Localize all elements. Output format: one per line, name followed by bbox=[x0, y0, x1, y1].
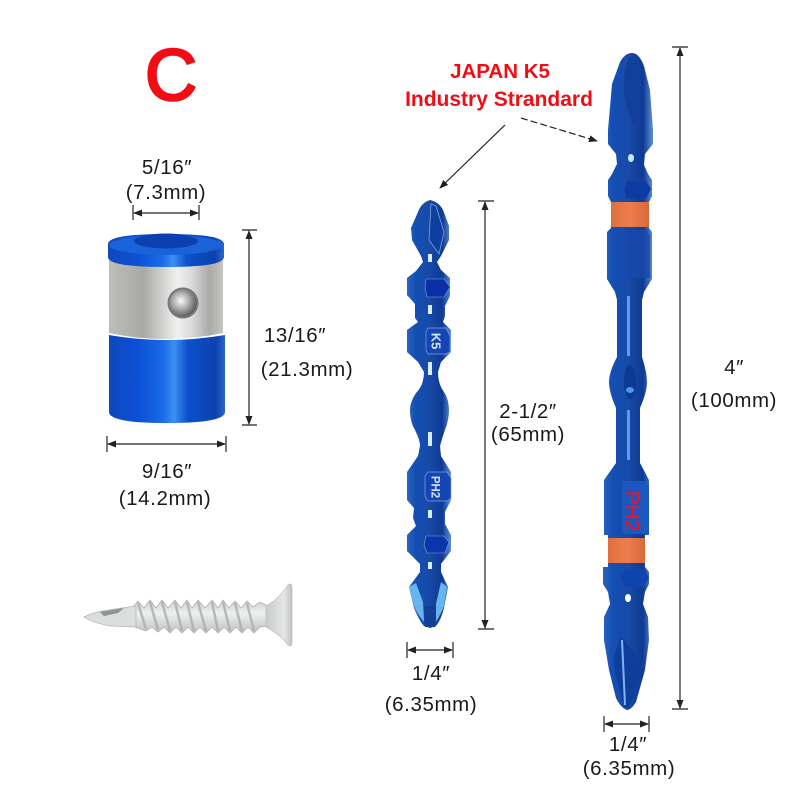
heading: Japan K5 Industry Standard bbox=[405, 60, 593, 111]
dimension: short bit hex width bbox=[385, 642, 477, 716]
long bit lower hex flat bbox=[621, 569, 649, 587]
screw drill tip bbox=[84, 606, 136, 627]
dimension: short bit length: (65mm) bbox=[491, 423, 565, 446]
screw countersunk head bbox=[266, 584, 292, 646]
short bit K5 mark: K5 bbox=[428, 333, 444, 349]
magnetic collar bbox=[108, 234, 225, 423]
dimension: long bit hex width: (6.35mm) bbox=[583, 757, 675, 780]
short K5 bit bbox=[407, 200, 451, 628]
short bit body bbox=[407, 200, 451, 628]
collar hole bbox=[134, 234, 198, 248]
short bit hex flat 1 bbox=[425, 279, 450, 297]
dimension: collar bore: 5/16″ bbox=[142, 156, 192, 179]
collar ball bearing bbox=[168, 288, 198, 318]
short bit lower tip flutes bbox=[409, 582, 447, 627]
heading: Japan K5 Industry Standard: JAPAN K5 bbox=[450, 60, 550, 83]
long bit upper hex flat bbox=[624, 181, 651, 198]
collar lower blue body bbox=[109, 335, 225, 423]
long bit lower orange band bbox=[608, 538, 645, 563]
dimension: short bit hex width: 1/4″ bbox=[412, 662, 450, 685]
dimension: collar height bbox=[242, 230, 353, 425]
long bit tip and upper hex bbox=[603, 53, 653, 710]
screw tip slot bbox=[100, 608, 124, 616]
short bit K5 hex flat bbox=[426, 328, 450, 354]
collar top blue rim bbox=[108, 234, 224, 267]
dimension: collar width: 9/16″ bbox=[142, 460, 192, 483]
screw bbox=[84, 584, 292, 646]
short bit highlights bbox=[428, 254, 432, 569]
dimension: collar bore: (7.3mm) bbox=[126, 181, 206, 204]
arrow: to short bit bbox=[440, 125, 505, 188]
dimension: collar width bbox=[107, 436, 226, 510]
long bit highlights bbox=[627, 296, 630, 460]
short bit PH2 mark: PH2 bbox=[428, 476, 440, 498]
collar top face bbox=[109, 235, 223, 255]
dimension: collar height: (21.3mm) bbox=[261, 358, 353, 381]
dimension: collar height: 13/16″ bbox=[264, 324, 326, 347]
dimension: collar bore bbox=[126, 156, 206, 220]
dimension: long bit hex width: 1/4″ bbox=[609, 733, 647, 756]
title letter C: C bbox=[145, 36, 197, 116]
dimension: long bit length: 4″ bbox=[724, 356, 744, 379]
long bit upper orange band bbox=[611, 202, 649, 227]
long bit top flute bbox=[624, 56, 642, 124]
short bit hex flat 2 bbox=[424, 536, 449, 553]
short bit top tip flute bbox=[429, 204, 444, 254]
arrow: to long bit bbox=[521, 118, 597, 141]
dimension: short bit length: 2-1/2″ bbox=[499, 400, 557, 423]
long bit bulge shading bbox=[624, 365, 636, 399]
dimension: long bit length: (100mm) bbox=[691, 389, 777, 412]
dimension: long bit length bbox=[672, 47, 777, 709]
short bit PH2 hex flat bbox=[425, 472, 451, 501]
dimension: short bit length bbox=[478, 201, 565, 629]
long PH2 bit bbox=[603, 53, 653, 710]
dimension: short bit hex width: (6.35mm) bbox=[385, 693, 477, 716]
dimension: long bit hex width bbox=[583, 716, 675, 780]
heading: Japan K5 Industry Standard: Industry Strandard bbox=[405, 88, 593, 111]
collar steel band bbox=[109, 260, 223, 339]
screw thread ridges bbox=[138, 602, 254, 631]
long bit PH2 mark: PH2 bbox=[620, 491, 643, 531]
screw threads bbox=[132, 600, 268, 633]
long bit upper hex panel bbox=[624, 229, 650, 278]
long bit lower tip flute bbox=[614, 637, 640, 708]
long bit PH2 panel bbox=[622, 481, 649, 534]
dimension: collar width: (14.2mm) bbox=[119, 487, 211, 510]
